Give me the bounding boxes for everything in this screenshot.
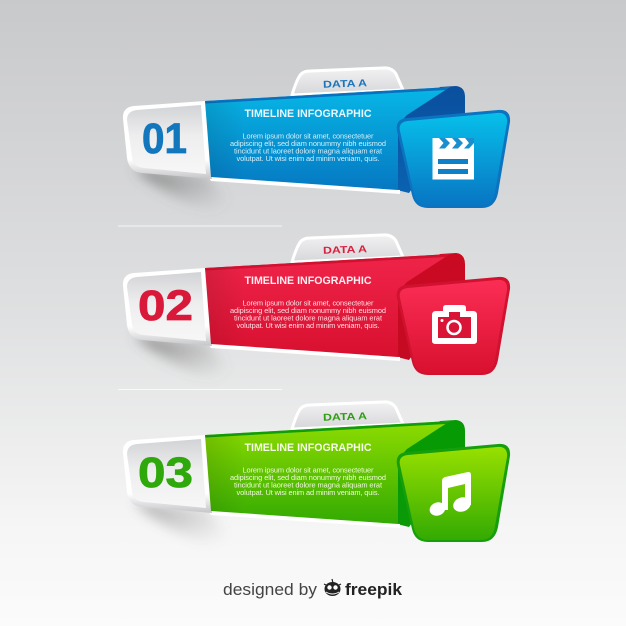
tab: data a: DATA A	[323, 244, 367, 257]
body text: tincidunt ut laoreet dolore magna aliquam erat	[234, 480, 382, 490]
designed by text: designed by	[223, 580, 318, 599]
card shadow	[134, 502, 240, 548]
main band	[205, 421, 450, 524]
card shadow	[134, 335, 240, 381]
tab: data a	[292, 235, 403, 262]
body text	[230, 132, 386, 163]
heading: TIMELINE INFOGRAPHIC	[244, 442, 372, 454]
body text: volutpat. Ut wisi enim ad minim veniam, quis.	[236, 154, 380, 163]
icon: camera	[432, 305, 477, 344]
number card	[123, 101, 212, 179]
number card	[123, 435, 212, 513]
panel: timeline step 03	[123, 402, 510, 548]
body text: adipiscing elit, sed diam nonummy nibh euismod	[230, 139, 386, 148]
body text: volutpat. Ut wisi enim ad minim veniam, quis.	[236, 321, 380, 330]
icon: freepik bee logo	[324, 579, 341, 596]
body text: tincidunt ut laoreet dolore magna aliquam erat	[234, 146, 382, 156]
body text: tincidunt ut laoreet dolore magna aliquam erat	[234, 314, 382, 322]
number 03: 03	[138, 449, 193, 497]
body text: Lorem ipsum dolor sit amet, consectetuer	[242, 132, 374, 140]
body text	[230, 298, 386, 330]
panel: timeline step 01	[123, 68, 510, 214]
icon: music note	[428, 472, 473, 518]
white edge under band	[208, 176, 400, 194]
heading: TIMELINE INFOGRAPHIC	[244, 108, 372, 120]
icon panel	[397, 110, 510, 208]
main band	[205, 87, 450, 190]
number 01: 01	[142, 115, 187, 163]
tab: data a	[292, 68, 403, 95]
white edge under band	[208, 510, 400, 528]
body text: adipiscing elit, sed diam nonummy nibh euismod	[230, 306, 386, 315]
body text: Lorem ipsum dolor sit amet, consectetuer	[242, 298, 374, 308]
folded band back	[397, 420, 465, 527]
folded band back	[397, 86, 465, 193]
icon panel	[397, 444, 510, 542]
footer credit	[223, 579, 403, 599]
main band	[205, 254, 450, 357]
card shadow	[134, 168, 240, 214]
body text: Lorem ipsum dolor sit amet, consectetuer	[242, 466, 374, 474]
heading: TIMELINE INFOGRAPHIC	[244, 275, 372, 287]
icon: clapperboard	[432, 138, 474, 180]
tab: data a	[292, 402, 403, 429]
folded band back	[397, 253, 465, 360]
body text: volutpat. Ut wisi enim ad minim veniam, quis.	[236, 488, 380, 497]
body text: adipiscing elit, sed diam nonummy nibh euismod	[230, 473, 386, 482]
number card	[123, 268, 212, 346]
tab: data a: DATA A	[323, 78, 367, 91]
white edge under band	[208, 343, 400, 361]
body text	[230, 466, 386, 497]
icon panel	[397, 277, 510, 375]
panel: timeline step 02	[123, 235, 510, 381]
number 02: 02	[138, 282, 193, 330]
tab: data a: DATA A	[323, 411, 367, 424]
freepik wordmark: freepik	[345, 580, 403, 599]
